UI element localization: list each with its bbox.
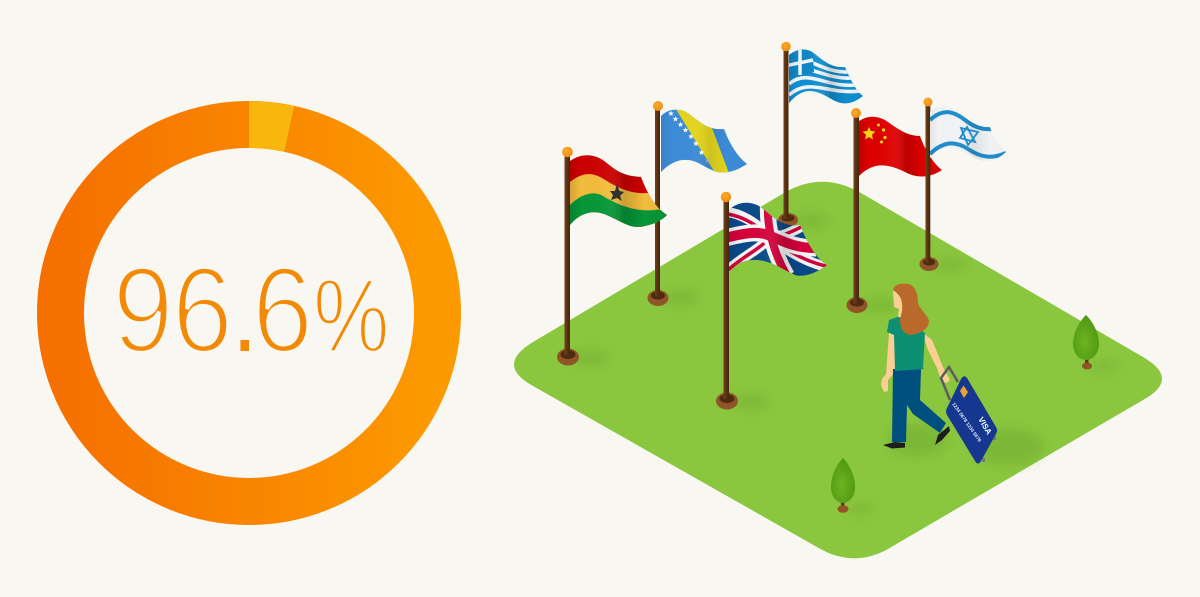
donut chart: 96.6% bbox=[60, 101, 438, 502]
flag: Ghana bbox=[557, 147, 670, 366]
VISA logo: VISA bbox=[976, 416, 994, 436]
donut remainder segment bbox=[249, 101, 294, 152]
flag cloth bbox=[930, 106, 1006, 161]
flag: Greece bbox=[778, 42, 867, 227]
finial bbox=[721, 192, 731, 202]
star of David bbox=[960, 127, 978, 145]
shoes bbox=[883, 426, 950, 448]
stars: ★ bbox=[688, 132, 695, 141]
wheels bbox=[982, 436, 996, 462]
card body bbox=[946, 376, 997, 464]
stars: ★ bbox=[682, 126, 689, 134]
traveller: woman walking bbox=[881, 284, 950, 448]
flag: Bosnia and Herzegovina bbox=[648, 101, 750, 306]
pole bbox=[926, 104, 930, 263]
left arm bbox=[881, 333, 898, 392]
pole base bbox=[716, 392, 738, 410]
finial bbox=[562, 147, 573, 157]
pole bbox=[784, 48, 788, 219]
hair bbox=[893, 284, 929, 335]
tree: right bbox=[1073, 315, 1099, 370]
percentage value bbox=[113, 242, 390, 378]
finial bbox=[781, 42, 791, 51]
pole base bbox=[648, 290, 668, 306]
black star bbox=[610, 184, 624, 201]
flag cloth bbox=[789, 50, 863, 104]
pole base bbox=[846, 297, 868, 313]
finial bbox=[851, 108, 861, 118]
flag cloth bbox=[859, 116, 942, 176]
card number: 1234 5678 1234 5678 bbox=[950, 402, 982, 444]
flag: China bbox=[846, 108, 946, 313]
stars: ★ bbox=[668, 109, 675, 118]
stars bbox=[668, 109, 712, 165]
trousers bbox=[892, 369, 946, 442]
stars: ★ bbox=[705, 156, 712, 165]
percentage value: % bbox=[313, 258, 390, 375]
percentage value: 6 bbox=[252, 242, 313, 378]
flag cloth bbox=[729, 202, 827, 276]
stars: ★ bbox=[698, 148, 705, 157]
flag cloth bbox=[570, 155, 667, 227]
pole base bbox=[920, 257, 938, 271]
finial bbox=[924, 98, 932, 106]
foliage bbox=[1073, 315, 1099, 360]
isometric green platform bbox=[514, 182, 1162, 558]
stars: ★ bbox=[693, 139, 700, 148]
pole bbox=[655, 108, 660, 296]
ground shadows bbox=[570, 214, 1118, 514]
percentage value: . bbox=[230, 242, 260, 378]
percentage value: 9 bbox=[113, 242, 174, 378]
pole base bbox=[778, 213, 798, 227]
flag: Israel bbox=[920, 98, 1010, 271]
percentage value: 6 bbox=[172, 242, 233, 378]
suitcase: credit card bbox=[941, 367, 997, 464]
pole bbox=[854, 115, 859, 304]
finial bbox=[653, 101, 663, 111]
flag cloth bbox=[661, 110, 747, 172]
tree: bottom bbox=[831, 458, 855, 513]
right arm bbox=[922, 332, 950, 383]
stars: ★ bbox=[677, 120, 684, 129]
trunk bbox=[1085, 356, 1088, 365]
flag: United Kingdom bbox=[716, 192, 830, 410]
shirt bbox=[887, 316, 925, 371]
pole base bbox=[557, 348, 579, 366]
pot bbox=[838, 505, 848, 513]
donut main segment bbox=[60, 124, 438, 502]
stars bbox=[862, 124, 887, 144]
telescopic handle bbox=[941, 367, 958, 400]
stars: ★ bbox=[672, 114, 679, 124]
pole bbox=[564, 154, 570, 355]
chip bbox=[960, 386, 968, 398]
face and neck bbox=[893, 290, 903, 318]
foliage bbox=[831, 458, 855, 503]
pot bbox=[1082, 362, 1092, 370]
pole bbox=[724, 199, 729, 399]
trunk bbox=[841, 498, 844, 508]
